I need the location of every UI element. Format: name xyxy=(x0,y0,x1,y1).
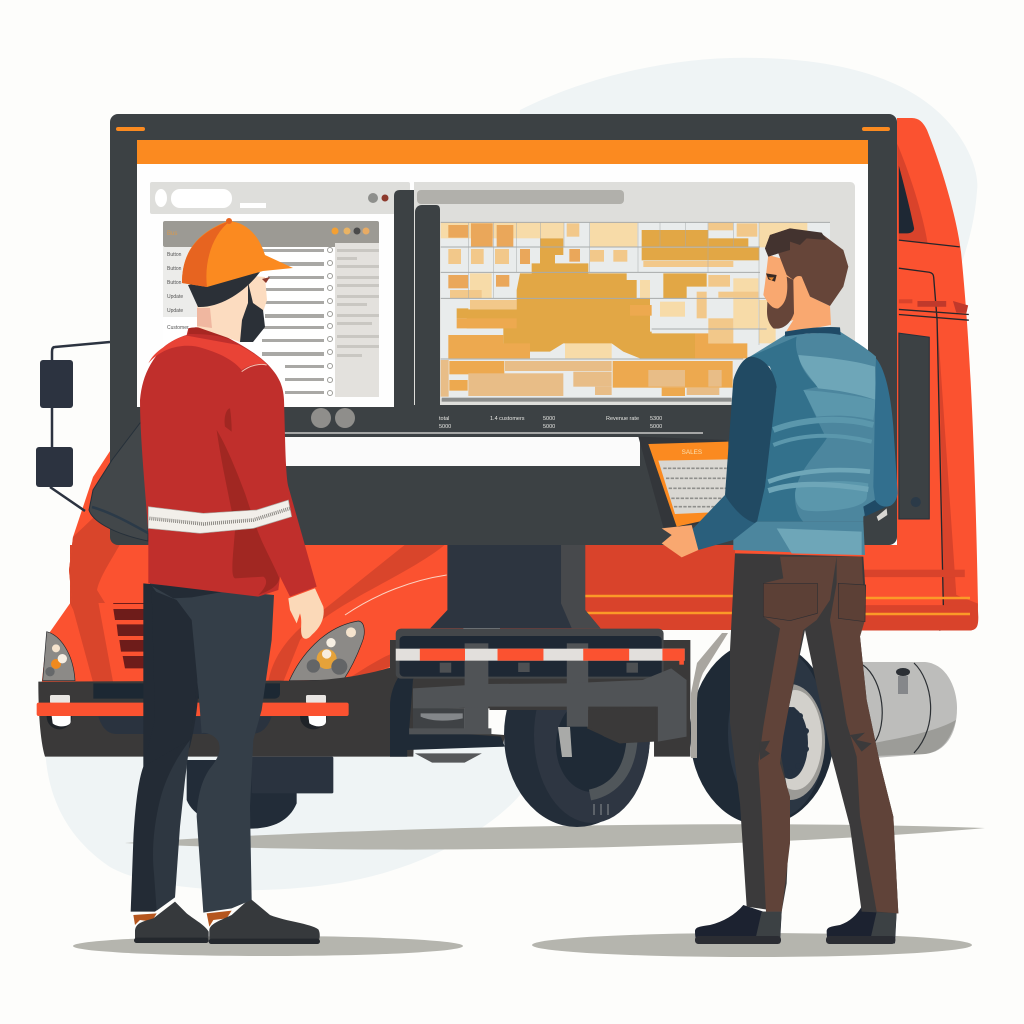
neck and face xyxy=(763,255,831,333)
bottom caption text: 5000 xyxy=(543,424,555,430)
hood xyxy=(42,543,463,683)
bottom caption text: 1.4 customers xyxy=(490,416,525,422)
windshield xyxy=(89,423,150,541)
sweater body xyxy=(750,332,876,522)
hem xyxy=(733,522,865,555)
map treemap xyxy=(441,222,830,402)
orange cap xyxy=(182,218,293,287)
ground shadows xyxy=(73,824,985,957)
trousers xyxy=(131,583,274,913)
truck cab rear body xyxy=(500,118,978,631)
bottom caption text: 5000 xyxy=(543,416,555,422)
monitor xyxy=(110,114,897,545)
worker in blue sweater xyxy=(638,228,898,944)
grille xyxy=(112,580,157,668)
bottom caption text xyxy=(439,416,662,430)
bumper xyxy=(38,658,417,757)
left dashboard panel: Update xyxy=(167,308,183,314)
trousers xyxy=(730,553,898,913)
beard xyxy=(767,277,794,329)
fuel tank xyxy=(850,662,957,760)
fog lights xyxy=(47,695,327,729)
bumper bar xyxy=(37,703,349,716)
jacket body xyxy=(140,327,317,597)
mud flap xyxy=(252,757,333,793)
left dashboard panel: Button xyxy=(167,252,182,258)
bottom caption text: total xyxy=(439,416,449,422)
bottom caption text: 5000 xyxy=(650,424,662,430)
collar xyxy=(785,327,841,337)
jacket with hand and band xyxy=(140,327,324,639)
wheel arch trim xyxy=(691,633,728,758)
tablet xyxy=(638,437,728,527)
right headlight xyxy=(289,621,364,681)
monitor stand xyxy=(430,540,600,628)
hand xyxy=(662,525,698,557)
upper hood behind cab xyxy=(69,448,150,603)
bottom caption text: 5000 xyxy=(439,424,451,430)
left dashboard panel: Button xyxy=(167,266,182,272)
truck front: hood, headlights, grille, bumper xyxy=(37,543,463,829)
upper body xyxy=(638,228,898,557)
rear wheel xyxy=(690,641,834,825)
bottom caption text: Revenue rate xyxy=(606,416,639,422)
left dashboard panel: Bus xyxy=(167,231,177,237)
screen xyxy=(137,140,868,432)
front axle wheel xyxy=(504,643,650,827)
shoes xyxy=(695,905,897,944)
left headlight xyxy=(43,632,75,681)
reflector strip xyxy=(396,649,685,665)
left dashboard panel: Customer xyxy=(167,325,189,331)
orange title bar xyxy=(137,140,868,164)
right map panel xyxy=(414,182,855,405)
tablet: SALES xyxy=(682,449,702,456)
dark map sidebar xyxy=(415,205,440,405)
reflective band xyxy=(148,500,292,533)
rear bar xyxy=(396,629,664,679)
boots xyxy=(133,898,320,944)
background blob xyxy=(45,58,977,890)
hair and beard xyxy=(188,272,260,307)
left dashboard panel xyxy=(150,182,410,397)
worker in red jacket xyxy=(131,218,324,944)
buttons under panel xyxy=(311,408,355,428)
underside and axle frame xyxy=(390,540,690,763)
neck and face xyxy=(197,275,267,342)
frame beams xyxy=(409,643,687,742)
hair xyxy=(765,228,848,306)
mirror assembly xyxy=(36,342,110,511)
sleeves xyxy=(873,358,898,507)
left dashboard panel: Button xyxy=(167,280,182,286)
dark divider column xyxy=(137,190,868,432)
left dashboard panel: Update xyxy=(167,294,183,300)
bottom caption text: 5300 xyxy=(650,416,662,422)
hand xyxy=(288,588,324,639)
lower white strip xyxy=(285,437,640,466)
cab front wheel xyxy=(187,760,297,829)
